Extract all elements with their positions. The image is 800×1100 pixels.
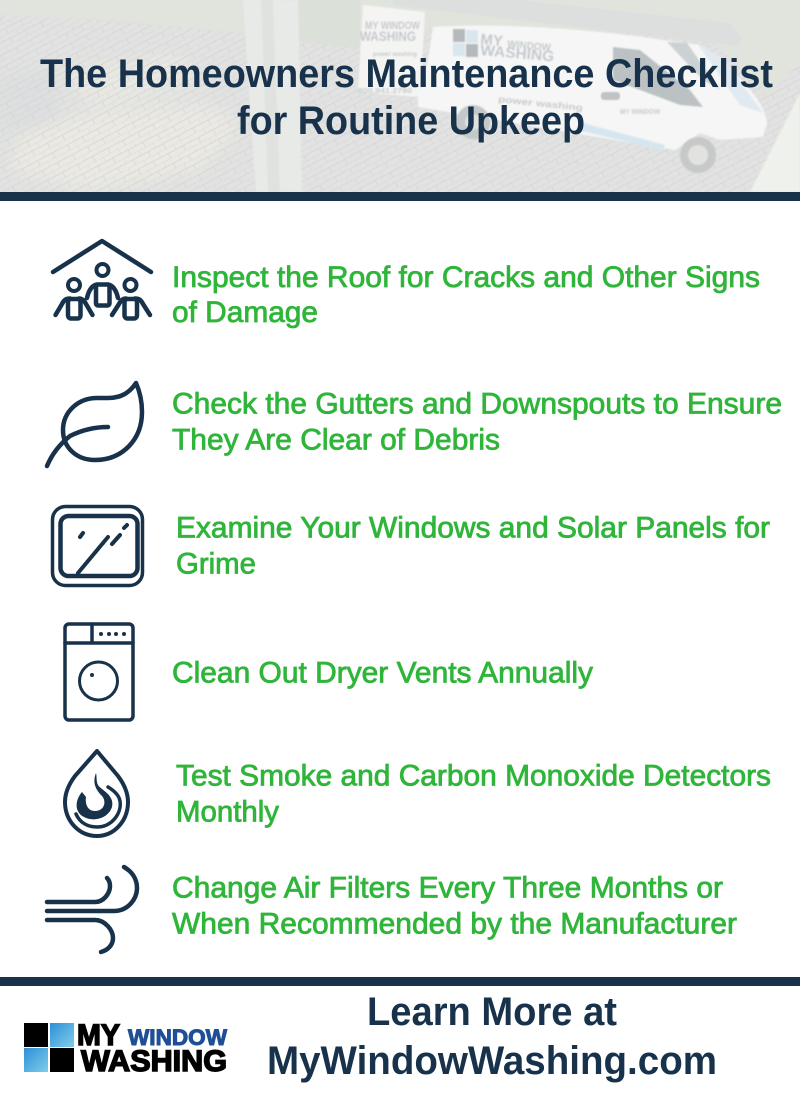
text: check the gutters: They Are Clear of Debris [172,424,500,456]
driveway background greenery: MY [480,31,504,50]
title: for Routine Upkeep [237,99,585,143]
driveway background greenery: MY WINDOW [620,109,660,116]
footer divider bar [0,977,800,986]
logo: My Window Washing [24,1019,227,1078]
text: check the gutters [172,388,782,456]
driveway background greenery [0,0,800,192]
text: inspect the roof: of Damage [172,296,318,329]
driveway background greenery: MY WINDOW [365,20,420,32]
icon: house with family [53,241,151,318]
text: change air filters: When Recommended by the Manufacturer [172,908,737,940]
text: test detectors: Test Smoke and Carbon Monoxide Detectors [176,760,771,792]
icon: leaf [47,383,142,466]
call to action: Learn More at [367,990,617,1034]
call to action [267,990,717,1083]
checklist item: roof [53,241,760,329]
text: examine windows: Examine Your Windows and Solar Panels for [176,512,770,544]
text: inspect the roof [172,261,760,329]
logo: My Window Washing: WASHING [81,1045,227,1078]
checklist item: dryer vents [65,624,593,720]
checklist item: gutters [47,383,782,466]
text: examine windows: Grime [176,548,256,580]
driveway background greenery: power washing [498,94,583,113]
text: change air filters: Change Air Filters Every Three Months or [172,872,723,904]
text: change air filters [172,872,737,940]
icon: flame drop [65,751,128,836]
header photo: van on paved driveway [0,0,800,192]
driveway background greenery: WINDOW [507,39,552,54]
text: test detectors [176,760,771,828]
driveway background greenery: 800.941.2790 [358,88,412,95]
call to action: MyWindowWashing.com [267,1039,717,1083]
title [40,52,773,143]
logo: My Window Washing: WINDOW [128,1025,227,1050]
checklist item: windows [52,506,770,586]
title: The Homeowners Maintenance Checklist [40,52,773,96]
driveway background greenery: WASHING [360,28,416,44]
driveway background greenery: power washing [373,52,417,58]
text: test detectors: Monthly [176,796,279,828]
icon: dryer [65,624,133,720]
driveway background greenery: WASHING [480,42,555,65]
checklist item: detectors [65,751,771,836]
text: clean out dryer vents: Clean Out Dryer Vents Annually [172,656,593,690]
text: check the gutters: Check the Gutters and Downspouts to Ensure [172,388,782,420]
icon: window [52,506,142,586]
header divider bar [0,192,800,201]
text: inspect the roof: Inspect the Roof for Cracks and Other Signs [172,261,760,294]
checklist item: air filters [47,867,737,952]
logo: My Window Washing: MY [77,1019,120,1052]
icon: wind [47,867,137,952]
text: examine windows [176,512,770,580]
